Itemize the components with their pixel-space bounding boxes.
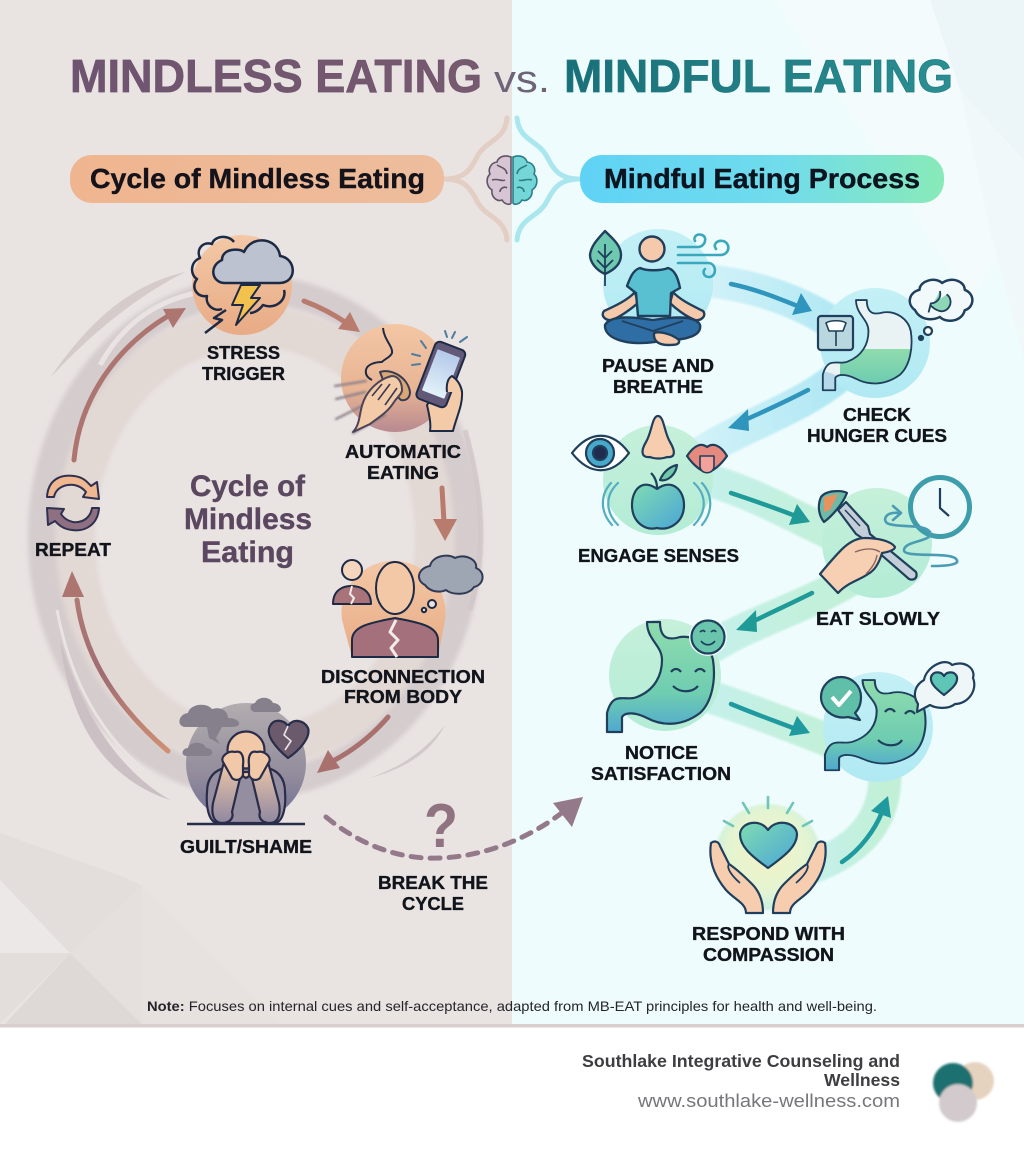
step: repeat (35, 476, 111, 560)
label: SATISFACTION (591, 764, 731, 784)
label: STRESS (207, 343, 280, 363)
step: engage senses (572, 416, 739, 566)
step: automatic eating (335, 324, 467, 483)
arrow: engage to eat (731, 493, 810, 525)
heading pill: mindful eating process: Mindful Eating Process (604, 163, 920, 194)
icon: person with cracked chest and static cloud (333, 556, 483, 657)
icon: brain (487, 156, 537, 204)
arrow: disconnection to guilt (317, 717, 388, 773)
icon: stomach gauge and scale (818, 280, 972, 400)
title (70, 50, 953, 102)
icon: meditating person (590, 229, 728, 345)
icon: hand, food and phone (335, 324, 467, 433)
center heading: cycle of mindless eating: Eating (201, 536, 294, 569)
label: EAT SLOWLY (816, 609, 940, 629)
label: EATING (367, 463, 439, 483)
arrow: notice to respond (731, 704, 810, 736)
icon: hands holding heart (710, 797, 826, 913)
label: TRIGGER (202, 364, 285, 384)
step: respond with compassion (692, 797, 845, 965)
arrow: repeat to stress (74, 308, 186, 460)
label (345, 442, 461, 483)
label: AUTOMATIC (345, 442, 461, 462)
center heading: cycle of mindless eating (184, 470, 312, 569)
connector swooshes around brain (444, 118, 580, 240)
arrow: pause to check (731, 284, 812, 315)
organization name (582, 1051, 900, 1090)
logo circles (933, 1062, 994, 1122)
label (692, 924, 845, 965)
heading pill: cycle of mindless eating (70, 155, 444, 203)
icon: repeat arrows (47, 476, 99, 530)
step: pause and breathe (590, 229, 728, 397)
center heading: cycle of mindless eating: Cycle of (190, 470, 306, 503)
icon: stomach with check and heart bubbles (821, 662, 974, 782)
label (591, 743, 731, 784)
title: MINDFUL EATING (564, 50, 953, 102)
label: PAUSE AND (602, 356, 714, 376)
arrow: compassion to stomach (842, 796, 891, 862)
label: DISCONNECTION (321, 667, 485, 687)
heading pill: cycle of mindless eating: Cycle of Mindless Eating (90, 163, 425, 194)
label: break the cycle: CYCLE (402, 894, 464, 914)
icon: eye, nose, tongue and apple (572, 416, 727, 535)
arrow: break the cycle dashed path (326, 797, 583, 858)
arrow: eat to notice (736, 593, 812, 632)
label: NOTICE (625, 743, 698, 763)
organization name: Southlake Integrative Counseling and (582, 1051, 900, 1071)
label (202, 343, 285, 384)
label: HUNGER CUES (807, 426, 947, 446)
icon: question mark: ? (424, 792, 458, 861)
icon: happy stomach (607, 618, 727, 732)
center heading: cycle of mindless eating: Mindless (184, 503, 312, 536)
label: CHECK (843, 405, 911, 425)
title: MINDLESS EATING (70, 50, 482, 102)
website: www.southlake-wellness.com (637, 1091, 900, 1111)
label: GUILT/SHAME (180, 837, 312, 857)
footer (0, 1024, 1024, 1154)
step: notice satisfaction (591, 618, 731, 784)
step: eat slowly (816, 478, 970, 629)
arrow: check to engage (728, 390, 808, 431)
arrow: stress to automatic (304, 301, 360, 332)
label: ENGAGE SENSES (578, 546, 739, 566)
note: Note: Focuses on internal cues and self-acceptance, adapted from MB-EAT principles for health and well-being. (147, 998, 877, 1014)
arrow: automatic to disconnection (433, 488, 457, 541)
label (602, 356, 714, 397)
arrow: guilt to repeat (62, 571, 168, 751)
label: REPEAT (35, 540, 111, 560)
icon: storm brain (192, 235, 293, 335)
step: contented stomach (821, 662, 974, 782)
label: break the cycle (378, 873, 488, 914)
background: mindless side (0, 0, 512, 1025)
icon: person covering face (179, 698, 308, 824)
label (321, 667, 485, 707)
heading pill: mindful eating process (580, 155, 944, 203)
chart: cycle ring with swooshes (42, 272, 481, 800)
label: break the cycle: BREAK THE (378, 873, 488, 893)
label: BREATHE (613, 377, 703, 397)
title: vs. (494, 59, 550, 101)
flow bands: mindful process path (690, 280, 885, 868)
organization name: Wellness (824, 1070, 900, 1090)
label: RESPOND WITH (692, 924, 845, 944)
step: check hunger cues (807, 280, 972, 446)
step: stress trigger (192, 235, 293, 384)
step: disconnection from body (321, 556, 485, 707)
background: mindful side (512, 0, 1024, 1025)
label: FROM BODY (344, 687, 462, 707)
label: COMPASSION (703, 945, 834, 965)
label (807, 405, 947, 446)
icon: hand with fork and clock (819, 478, 970, 598)
step: guilt/shame (179, 698, 312, 857)
